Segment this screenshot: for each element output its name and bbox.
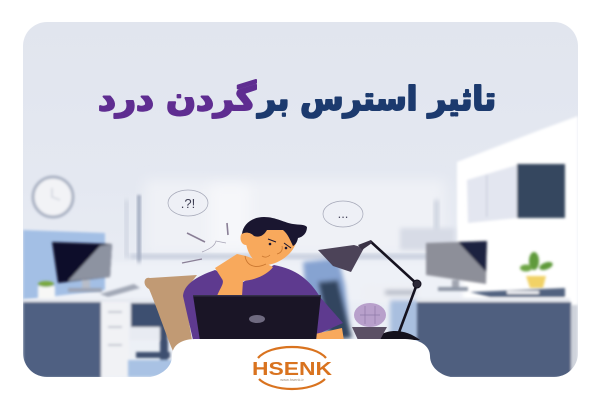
illustration: man at laptop (145, 217, 344, 351)
right wall cabinet (467, 164, 565, 223)
face details (268, 239, 291, 248)
ear (240, 231, 252, 245)
shirt (183, 265, 343, 340)
desk lamp (318, 240, 421, 340)
speech bubble: ?! (168, 190, 208, 216)
speech bubble: dots (323, 201, 363, 227)
logo: HSENK (252, 347, 332, 389)
speech bubble: dots: ... (338, 206, 348, 221)
icon: pain strokes (182, 223, 228, 263)
head (245, 226, 297, 265)
bottom white tab (140, 339, 460, 400)
logo: HSENK: www.hsenk.ir (280, 377, 304, 382)
right desk (417, 288, 578, 378)
left monitor (52, 242, 140, 297)
cactus plant (352, 303, 387, 340)
back right desk (383, 288, 418, 341)
title (98, 79, 496, 119)
small plant (38, 281, 55, 300)
plant on right desk (520, 252, 554, 288)
neck and hand (215, 254, 273, 296)
chair backrest (145, 275, 197, 351)
white right wall (456, 116, 578, 306)
left blue wall (23, 230, 105, 300)
laptop (193, 295, 321, 341)
blue chair behind man (303, 258, 352, 340)
window glow (149, 184, 440, 240)
right monitor (426, 241, 487, 291)
hair (242, 217, 307, 246)
title: گردن درد (98, 79, 257, 119)
speech bubble: ?!: .?! (181, 196, 195, 211)
left desk (23, 299, 133, 378)
forearm (315, 328, 344, 341)
logo: HSENK: HSENK (252, 359, 332, 379)
office chair background (126, 301, 172, 377)
title: تاثیر استرس بر (256, 79, 496, 119)
icon: wall clock (33, 177, 73, 217)
